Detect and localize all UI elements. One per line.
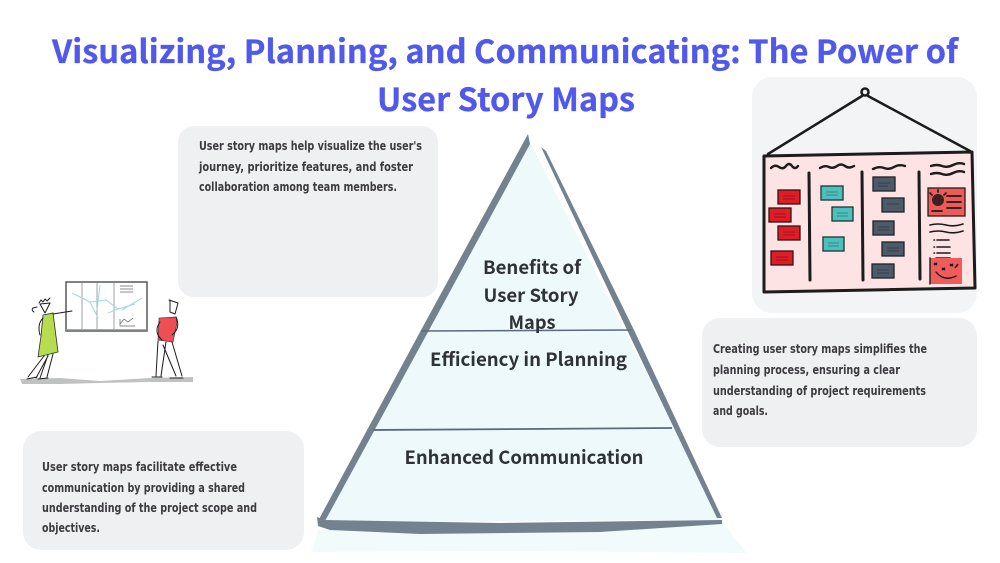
right column sketch card <box>930 258 962 284</box>
right column notes <box>930 224 963 258</box>
pyramid base glow <box>312 522 747 553</box>
pyramid tier labels: Maps <box>508 309 556 335</box>
panel: communication text box: communication by providing a shared <box>42 480 245 495</box>
board backdrop <box>752 77 977 313</box>
panel: visualize text box: collaboration among team members. <box>199 179 397 194</box>
pyramid fill <box>322 140 720 522</box>
pyramid tier labels: Efficiency in Planning <box>430 346 627 372</box>
panel: planning text box: understanding of project requirements <box>713 383 926 398</box>
panel: communication text box: understanding of the project scope and <box>42 500 257 515</box>
illustration: two people reviewing a story map <box>20 282 193 384</box>
column dividers <box>809 172 920 280</box>
title: User Story Maps <box>377 75 635 121</box>
wall map <box>66 282 147 331</box>
card scribbles <box>774 183 899 273</box>
hanging string and hook <box>768 88 970 154</box>
man in red shirt <box>152 300 183 378</box>
panel: planning text box: Creating user story maps simplifies the <box>713 341 927 356</box>
panel: communication text box <box>23 431 304 550</box>
panel: visualize text box: journey, prioritize features, and foster <box>198 159 413 174</box>
panel: communication text box: objectives. <box>42 520 100 535</box>
pyramid tier labels: User Story <box>484 282 579 308</box>
title: Visualizing, Planning, and Communicating: The Power of <box>51 27 959 73</box>
pyramid outline <box>317 134 722 534</box>
board frame <box>764 152 975 292</box>
pyramid dividers <box>373 330 672 430</box>
panel: planning text box: planning process, ensuring a clear <box>713 362 900 377</box>
pyramid tier labels: Enhanced Communication <box>404 444 644 470</box>
panel: visualize text box <box>178 126 438 297</box>
teal cards <box>821 186 853 251</box>
woman in green dress <box>27 298 72 379</box>
title <box>51 27 959 121</box>
pyramid tier labels: Benefits of <box>483 254 582 280</box>
illustration: story map board <box>752 77 977 313</box>
ground shadow <box>20 377 193 384</box>
column headings <box>771 163 964 175</box>
panel: planning text box: and goals. <box>713 403 768 418</box>
pyramid tier labels <box>404 254 644 470</box>
right column idea card <box>928 188 965 216</box>
panel: visualize text box: User story maps help visualize the user's <box>199 138 422 153</box>
pyramid chart <box>312 134 747 553</box>
panel: planning text box <box>702 318 977 447</box>
slate cards <box>872 177 904 278</box>
panel: communication text box: User story maps facilitate effective <box>42 459 237 474</box>
red cards <box>769 190 800 265</box>
